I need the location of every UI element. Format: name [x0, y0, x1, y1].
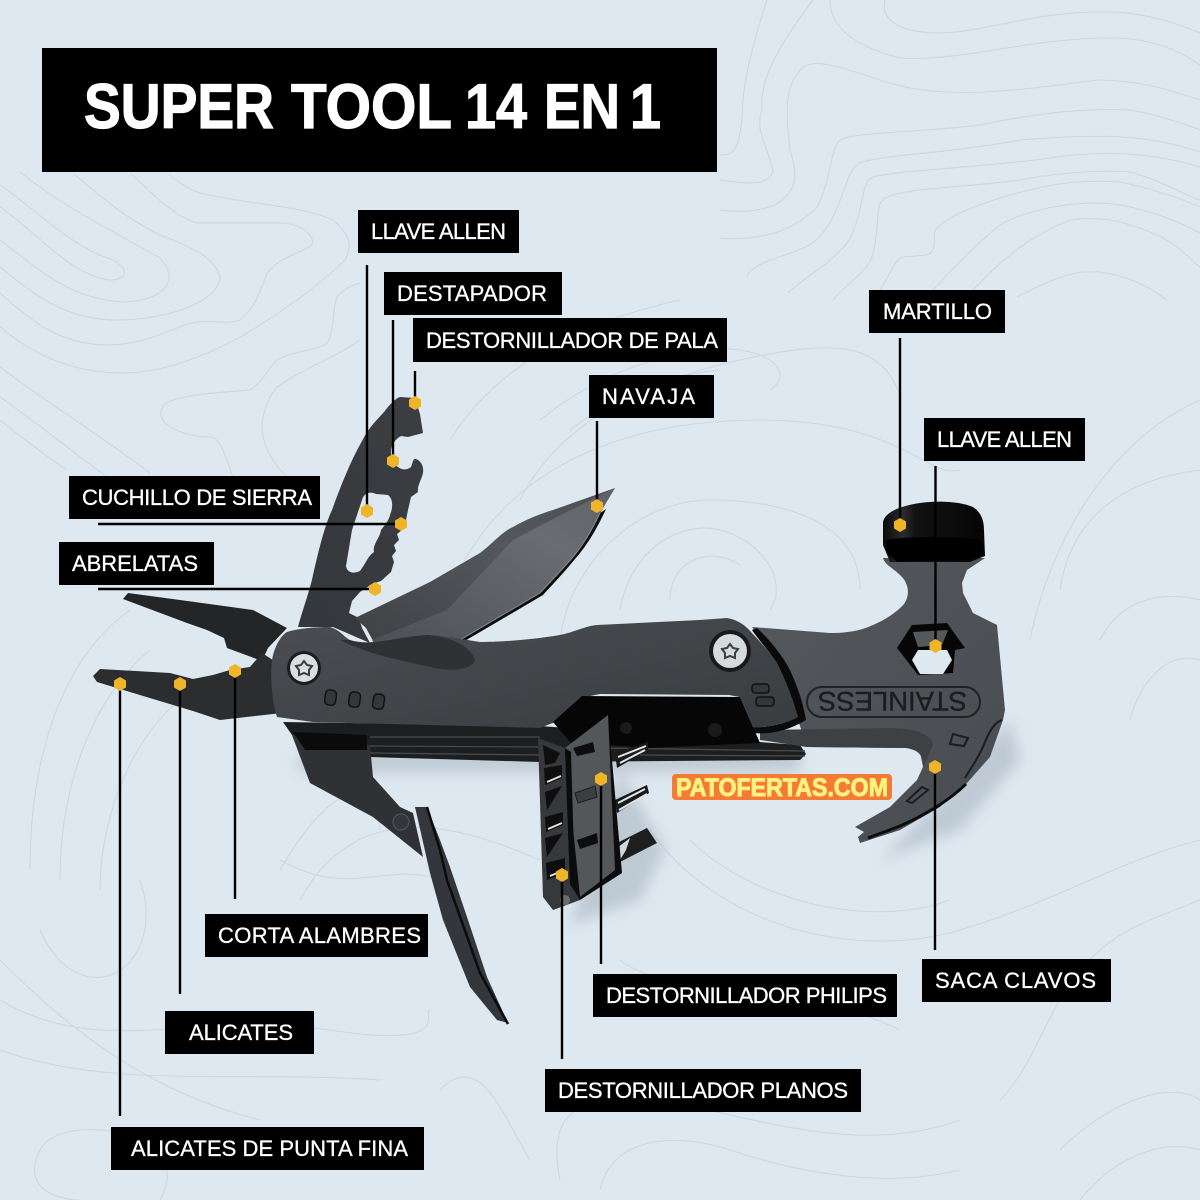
label: navaja: NAVAJA — [602, 384, 695, 409]
rivet left — [287, 651, 321, 685]
title banner: 14 — [465, 72, 527, 142]
handle thumb groove — [340, 635, 475, 670]
pliers upper jaw — [123, 593, 287, 661]
hammer head — [883, 502, 985, 562]
label: llave allen right — [924, 418, 1085, 461]
label: destapador — [384, 272, 562, 315]
leader lines — [98, 265, 936, 1116]
label: saca clavos — [922, 959, 1111, 1002]
label: cuchillo de sierra — [69, 476, 320, 519]
label: destornillador planos — [545, 1069, 861, 1112]
label: corta alambres — [205, 914, 428, 957]
serrated folding lever — [292, 732, 423, 857]
label: martillo — [869, 290, 1005, 333]
label: alicates — [165, 1011, 314, 1054]
title banner: 1 — [630, 72, 661, 142]
label: cuchillo de sierra: CUCHILLO DE SIERRA — [82, 485, 312, 510]
label: destornillador philips — [593, 974, 897, 1017]
hex socket — [897, 623, 965, 675]
folding knife blade — [355, 488, 615, 648]
label: martillo: MARTILLO — [883, 299, 992, 324]
label: alicates: ALICATES — [189, 1020, 293, 1045]
label: destornillador philips: DESTORNILLADOR PHILIPS — [606, 983, 887, 1008]
label: alicates de punta fina: ALICATES DE PUNTA FINA — [131, 1136, 408, 1161]
watermark: patofertas.com: PATOFERTAS.COM — [676, 774, 888, 802]
screwdriver bits — [615, 742, 657, 862]
label: saca clavos: SACA CLAVOS — [935, 968, 1096, 993]
bit holder block — [538, 715, 622, 910]
label: llave allen top: LLAVE ALLEN — [371, 219, 506, 244]
hammer body — [752, 558, 1005, 843]
saw blade bottom — [415, 807, 508, 1024]
label: destapador: DESTAPADOR — [397, 281, 547, 306]
label: destornillador de pala: DESTORNILLADOR DE PALA — [426, 328, 718, 353]
label: abrelatas: ABRELATAS — [72, 551, 198, 576]
title banner: TOOL — [291, 72, 452, 142]
rivet right — [709, 630, 751, 672]
grip dots — [324, 684, 774, 710]
marker dots — [114, 396, 942, 882]
tool shadows — [300, 720, 1020, 925]
claw shading — [760, 728, 933, 767]
title banner — [42, 48, 717, 172]
label: abrelatas — [59, 542, 214, 585]
label: corta alambres: CORTA ALAMBRES — [218, 923, 421, 948]
main handle — [271, 618, 798, 728]
pliers lower jaw — [93, 653, 282, 720]
title banner: EN — [544, 72, 620, 142]
folded tool stack — [283, 722, 806, 762]
label: navaja — [589, 375, 714, 418]
handle cavity — [553, 696, 760, 748]
title banner: SUPER — [84, 72, 274, 142]
label: destornillador de pala — [413, 318, 727, 362]
stainless embossed plate: STAINLESS — [818, 686, 967, 716]
multi-tool illustration — [93, 397, 1020, 1024]
label: llave allen right: LLAVE ALLEN — [937, 427, 1072, 452]
label: alicates de punta fina — [111, 1127, 424, 1170]
claw details — [868, 720, 1002, 838]
opener and saw arm — [298, 397, 423, 643]
handle end edge — [752, 628, 806, 733]
label: destornillador planos: DESTORNILLADOR PLANOS — [558, 1078, 848, 1103]
label: llave allen top — [358, 210, 519, 253]
